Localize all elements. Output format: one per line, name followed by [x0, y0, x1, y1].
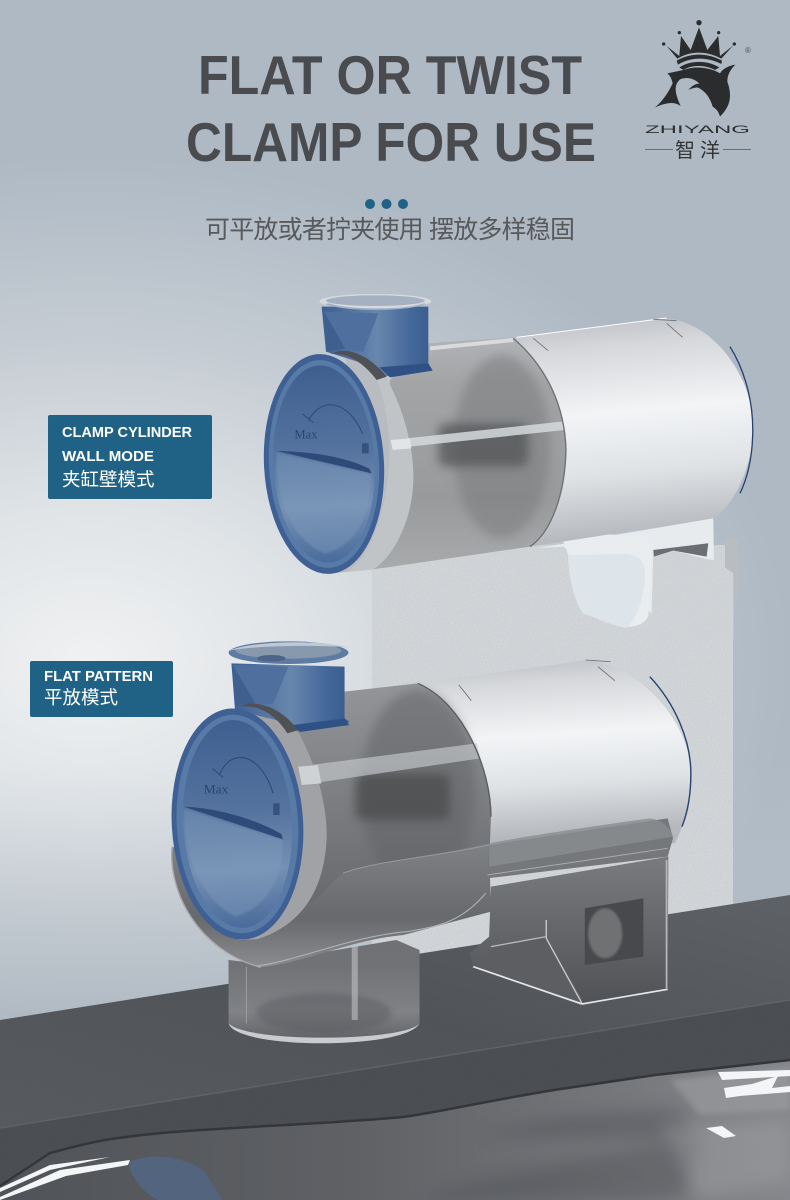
water: blue reflection: [128, 1157, 222, 1200]
water: grey reflection: [420, 1109, 700, 1200]
label: clamp cylinder wall mode: WALL MODE: [62, 449, 154, 465]
title: CLAMP FOR USE: [186, 111, 596, 173]
title: FLAT OR TWIST: [198, 44, 582, 106]
upper cap: [258, 351, 390, 577]
lower base housing: [172, 818, 673, 967]
label: flat pattern: [30, 661, 173, 717]
logo chinese name: 智洋: [675, 139, 720, 162]
logo wordmark: ZHIYANG: [645, 124, 750, 136]
water: white glints: [0, 1070, 790, 1200]
upper feeder: clamp mode: [258, 294, 753, 640]
title: [186, 44, 596, 173]
lower right bracket: [470, 857, 668, 1005]
upper collar: [333, 354, 413, 573]
label: flat pattern: 平放模式: [44, 687, 118, 708]
label: clamp cylinder wall mode: [48, 415, 212, 499]
lower feeder: flat mode: [165, 641, 691, 1043]
water reflection: [0, 1060, 790, 1200]
lower collar: [239, 704, 327, 940]
label: clamp cylinder wall mode: CLAMP CYLINDER: [62, 425, 193, 441]
upper transparent hopper: [373, 337, 566, 569]
upper clamp bracket: [537, 518, 733, 640]
lower cap: [165, 703, 310, 943]
Max marking: Max: [204, 782, 229, 796]
label: clamp cylinder wall mode: 夹缸壁模式: [62, 469, 155, 490]
logo crown and dolphin: [655, 20, 736, 117]
logo: [645, 20, 751, 162]
lower funnel: [229, 641, 349, 732]
Max marking: Max: [294, 428, 318, 442]
shelf: [0, 895, 790, 1200]
wall panel: [372, 538, 738, 965]
label: flat pattern: FLAT PATTERN: [44, 669, 153, 685]
subtitle: 可平放或者拧夹使用 摆放多样稳固: [205, 216, 575, 244]
lower white body: [418, 660, 691, 843]
upper funnel: [319, 294, 433, 377]
three dots: [365, 199, 408, 209]
lower transparent hopper: [296, 683, 491, 913]
upper white body: [513, 318, 753, 547]
lower foot: [229, 940, 420, 1043]
registered mark: ®: [745, 46, 751, 55]
